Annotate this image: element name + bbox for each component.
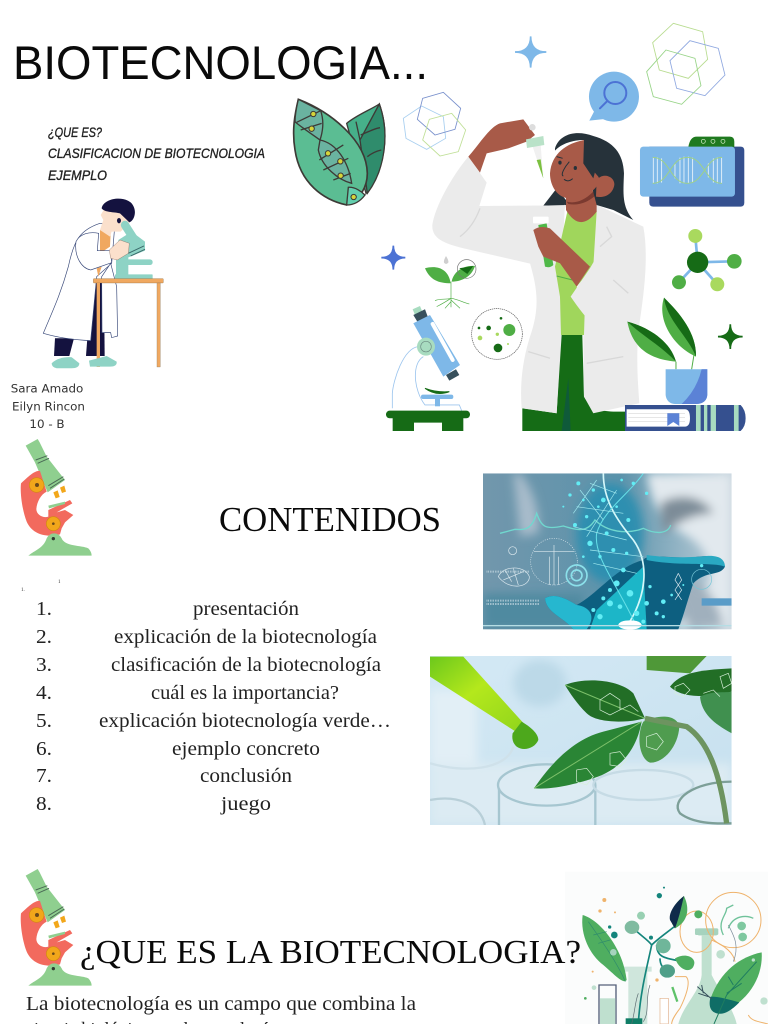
numbered contents list: juego xyxy=(220,793,271,815)
numbered contents list: 6. xyxy=(36,738,52,760)
icon: molecule xyxy=(672,229,742,291)
photo: green drop on leaves xyxy=(430,656,732,825)
text block: authors: 10 - B xyxy=(29,417,65,431)
icon: sprout xyxy=(425,256,476,308)
tiny marks: 1 xyxy=(58,580,61,585)
text block: topics: EJEMPLO xyxy=(48,167,107,183)
numbered contents list: 5. xyxy=(36,710,52,732)
illustration: plants and flasks xyxy=(565,872,768,1024)
title: BIOTECNOLOGIA... xyxy=(13,36,428,89)
text block: authors: Eilyn Rincon xyxy=(12,400,85,414)
icon: search bubble xyxy=(589,72,639,122)
numbered contents list: 3. xyxy=(36,654,52,676)
numbered contents list: cuál es la importancia? xyxy=(151,682,339,704)
numbered contents list xyxy=(36,598,391,815)
icon: books xyxy=(625,405,746,431)
icon: hexagons top right xyxy=(647,23,725,104)
icon: blue small star xyxy=(381,246,405,270)
numbered contents list: explicación de la biotecnología xyxy=(114,626,377,648)
numbered contents list: 4. xyxy=(36,682,52,704)
icon: dna folder xyxy=(640,137,744,207)
icon: microscope contents xyxy=(21,439,92,556)
text block: topics: CLASIFICACION DE BIOTECNOLOGIA xyxy=(48,145,265,161)
numbered contents list: ejemplo concreto xyxy=(172,738,320,760)
icon: petri dish xyxy=(472,309,522,359)
icon: scientist at microscope xyxy=(43,199,163,368)
numbered contents list: 1. xyxy=(36,598,52,620)
numbered contents list: explicación biotecnología verde… xyxy=(99,710,391,732)
icon: dna leaves xyxy=(294,99,385,205)
numbered contents list: presentación xyxy=(193,598,299,620)
text block: topics: ¿QUE ES? xyxy=(48,124,102,140)
text block: topics xyxy=(48,124,265,183)
tiny marks xyxy=(21,580,61,593)
numbered contents list: 7. xyxy=(36,765,52,787)
paragraph: La biotecnología es un campo que combina la xyxy=(26,993,416,1015)
icon: hexagons left xyxy=(403,92,466,156)
photo: digital hand with dna xyxy=(483,473,732,630)
tiny marks: 1. xyxy=(21,588,25,593)
text block: authors: Sara Amado xyxy=(11,382,83,396)
icon: potted plant xyxy=(627,298,707,404)
paragraph xyxy=(26,993,416,1024)
numbered contents list: 8. xyxy=(36,793,52,815)
numbered contents list: conclusión xyxy=(200,765,292,787)
icon: blue microscope xyxy=(386,306,470,431)
numbered contents list: 2. xyxy=(36,626,52,648)
icon: dark green star xyxy=(718,324,743,349)
heading: que es la biotecnologia: ¿QUE ES LA BIOTECNOLOGIA? xyxy=(80,934,581,971)
heading: contenidos: CONTENIDOS xyxy=(219,500,441,539)
illustration: scientist woman and lab icons xyxy=(381,23,746,431)
icon: woman scientist xyxy=(432,119,646,431)
text block: authors xyxy=(11,382,85,431)
icon: blue star xyxy=(515,36,546,68)
numbered contents list: clasificación de la biotecnología xyxy=(111,654,381,676)
icon: microscope second xyxy=(21,869,92,986)
